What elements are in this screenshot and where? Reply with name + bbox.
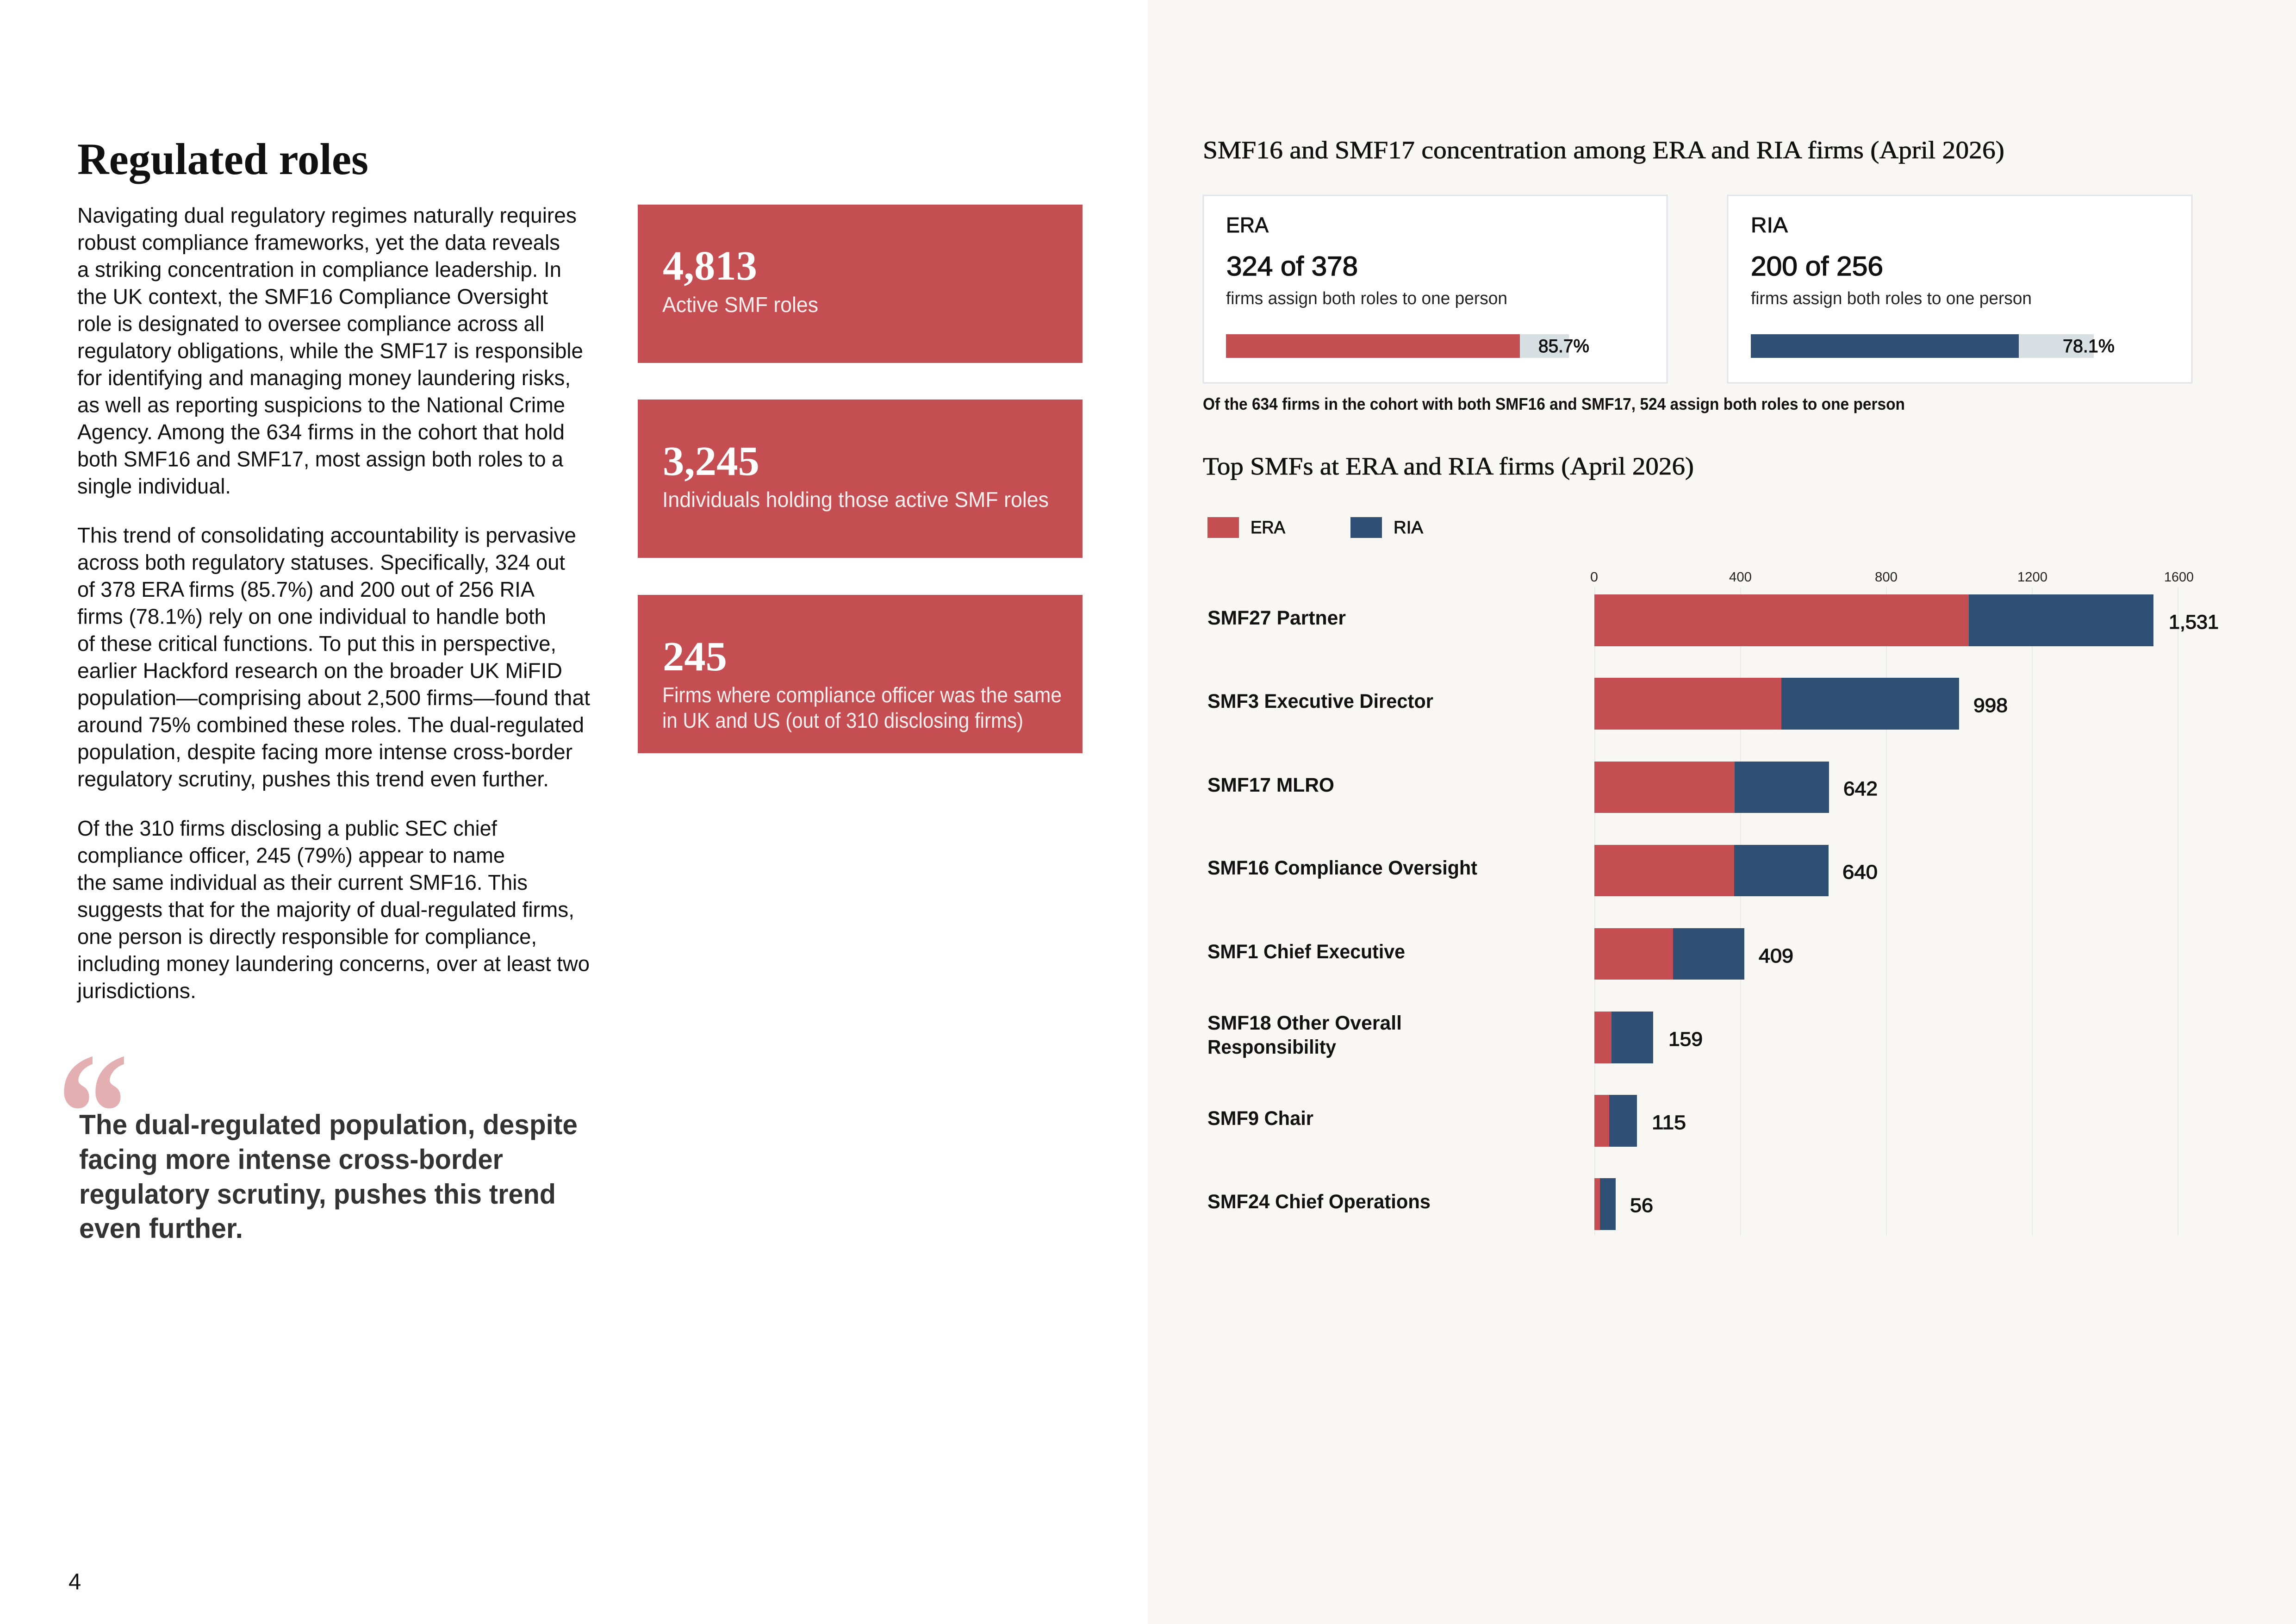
stat card: individuals [638, 400, 1083, 558]
body paragraph 1: role is designated to oversee compliance across all [77, 312, 544, 336]
panel: RIA [1728, 195, 2192, 383]
body paragraph 1: as well as reporting suspicions to the National Crime [77, 393, 565, 417]
body paragraph 3: suggests that for the majority of dual-regulated firms, [77, 897, 574, 921]
row: SMF18 Other Overall Responsibility: Responsibility [1207, 1036, 1336, 1058]
row: SMF3 Executive Director: 998 [1973, 694, 2008, 717]
row: SMF24 Chief Operations: 56 [1630, 1194, 1653, 1217]
stat card: individuals: 3,245 [663, 438, 759, 484]
row: SMF3 Executive Director: SMF3 Executive Director [1207, 690, 1433, 712]
row: SMF27 Partner: SMF27 Partner [1207, 607, 1346, 629]
body paragraph 3: including money laundering concerns, over at least two [77, 952, 590, 976]
body paragraph 1: both SMF16 and SMF17, most assign both roles to a [77, 447, 563, 471]
stat card: active SMF roles: 4,813 [663, 243, 757, 289]
pull quote text: facing more intense cross-border [79, 1144, 503, 1175]
body paragraph 2: This trend of consolidating accountability is pervasive [77, 523, 576, 547]
page number: 4 [68, 1569, 81, 1594]
right page background [1148, 0, 2296, 1624]
progress bar: ERA 85.7%: 85.7% [1538, 336, 1589, 356]
row: SMF27 Partner: 1,531 [2169, 611, 2219, 633]
stacked bar chart [1207, 570, 2219, 1236]
body paragraph 3: jurisdictions. [76, 979, 196, 1003]
stat card: active SMF roles: Active SMF roles [662, 293, 818, 317]
panel: ERA: 324 of 378 [1226, 251, 1358, 281]
legend: ERA [1251, 518, 1286, 537]
heading: top SMFs: Top SMFs at ERA and RIA firms (April 2026) [1203, 452, 1694, 480]
panel: ERA: ERA [1226, 213, 1269, 237]
panel: ERA: firms assign both roles to one person [1226, 289, 1507, 308]
left page background [0, 0, 1148, 1624]
body paragraph 2: earlier Hackford research on the broader UK MiFID [77, 658, 562, 682]
body paragraph 3: the same individual as their current SMF16. This [77, 870, 528, 894]
row: SMF9 Chair: 115 [1652, 1112, 1686, 1134]
row: SMF16 Compliance Oversight: 640 [1842, 861, 1878, 883]
progress bar: RIA 78.1%: 78.1% [2063, 336, 2115, 356]
row: SMF1 Chief Executive [1207, 928, 1793, 980]
stat card: same compliance officer: 245 [663, 634, 727, 680]
body paragraph 2: across both regulatory statuses. Specifically, 324 out [77, 550, 565, 574]
stat card: same compliance officer: Firms where compliance officer was the same [662, 683, 1062, 707]
body paragraph 2 [77, 523, 590, 791]
row: SMF18 Other Overall Responsibility: SMF18 Other Overall [1207, 1012, 1402, 1034]
body paragraph 1: a striking concentration in compliance leadership. In [77, 257, 561, 281]
panel: RIA: 200 of 256 [1751, 251, 1883, 281]
panel: RIA: RIA [1751, 213, 1788, 237]
icon: quotation mark: “ [57, 1017, 129, 1208]
row: SMF1 Chief Executive: 409 [1759, 945, 1793, 967]
body paragraph 2: population, despite facing more intense cross-border [77, 740, 572, 764]
body paragraph 2: of these critical functions. To put this in perspective, [77, 631, 556, 656]
pull quote text: regulatory scrutiny, pushes this trend [79, 1179, 556, 1210]
body paragraph 2: of 378 ERA firms (85.7%) and 200 out of 256 RIA [77, 577, 535, 601]
body paragraph 2: population—comprising about 2,500 firms—found that [77, 686, 590, 710]
pull quote text [79, 1109, 578, 1244]
row: SMF16 Compliance Oversight: SMF16 Compliance Oversight [1207, 857, 1477, 879]
row: SMF27 Partner [1207, 594, 2219, 646]
chart axis: 800 [1875, 570, 1898, 585]
body paragraph 3 [76, 816, 590, 1003]
row: SMF3 Executive Director [1207, 678, 2008, 730]
legend: RIA [1394, 518, 1424, 537]
row: SMF24 Chief Operations: SMF24 Chief Operations [1207, 1191, 1431, 1213]
row: SMF17 MLRO: 642 [1843, 778, 1878, 800]
stat card: individuals: Individuals holding those active SMF roles [662, 487, 1049, 512]
body paragraph 2: regulatory scrutiny, pushes this trend even further. [77, 767, 549, 791]
stat card: active SMF roles [638, 205, 1083, 363]
body paragraph 1: Navigating dual regulatory regimes naturally requires [77, 203, 577, 227]
row: SMF16 Compliance Oversight [1207, 845, 1878, 896]
body paragraph 1: Agency. Among the 634 firms in the cohort that hold [77, 420, 565, 444]
body paragraph 1: for identifying and managing money laundering risks, [77, 366, 571, 390]
chart axis [1590, 570, 2194, 1236]
body paragraph 3: one person is directly responsible for compliance, [77, 924, 537, 949]
progress bar: RIA 78.1% [1751, 334, 2115, 358]
row: SMF18 Other Overall Responsibility: 159 [1668, 1028, 1703, 1050]
body paragraph 1: regulatory obligations, while the SMF17 is responsible [77, 339, 583, 363]
body paragraph 3: Of the 310 firms disclosing a public SEC chief [77, 816, 497, 840]
chart axis: 0 [1590, 570, 1598, 585]
chart axis: 1200 [2017, 570, 2047, 585]
row: SMF9 Chair: SMF9 Chair [1207, 1107, 1313, 1130]
row: SMF1 Chief Executive: SMF1 Chief Executive [1207, 941, 1405, 963]
pull quote text: even further. [79, 1213, 243, 1244]
cohort note: Of the 634 firms in the cohort with both SMF16 and SMF17, 524 assign both roles to one person [1203, 394, 1905, 413]
row: SMF17 MLRO: SMF17 MLRO [1207, 774, 1334, 796]
chart axis: 1600 [2164, 570, 2194, 585]
stat card: same compliance officer: in UK and US (out of 310 disclosing firms) [662, 708, 1023, 732]
chart axis: 400 [1729, 570, 1752, 585]
body paragraph 1: the UK context, the SMF16 Compliance Oversight [77, 284, 548, 308]
heading: concentration: SMF16 and SMF17 concentration among ERA and RIA firms (April 2026) [1203, 136, 2004, 164]
progress bar: ERA 85.7% [1226, 334, 1589, 358]
stat card: same compliance officer [638, 595, 1083, 753]
title: Regulated roles [77, 134, 368, 184]
body paragraph 1: robust compliance frameworks, yet the data reveals [77, 231, 560, 255]
body paragraph 2: firms (78.1%) rely on one individual to handle both [77, 605, 546, 629]
body paragraph 3: compliance officer, 245 (79%) appear to name [77, 843, 505, 868]
row: SMF17 MLRO [1207, 762, 1878, 813]
pull quote [57, 1017, 578, 1244]
row: SMF24 Chief Operations [1207, 1178, 1653, 1230]
legend [1207, 517, 1424, 538]
body paragraph 2: around 75% combined these roles. The dual-regulated [77, 713, 584, 737]
row: SMF18 Other Overall Responsibility [1207, 1012, 1703, 1063]
row: SMF9 Chair [1207, 1095, 1686, 1147]
body paragraph 1: single individual. [77, 474, 231, 498]
panel: ERA [1203, 195, 1667, 383]
body paragraph 1 [77, 203, 583, 498]
panel: RIA: firms assign both roles to one person [1751, 289, 2032, 308]
pull quote text: The dual-regulated population, despite [79, 1109, 578, 1140]
